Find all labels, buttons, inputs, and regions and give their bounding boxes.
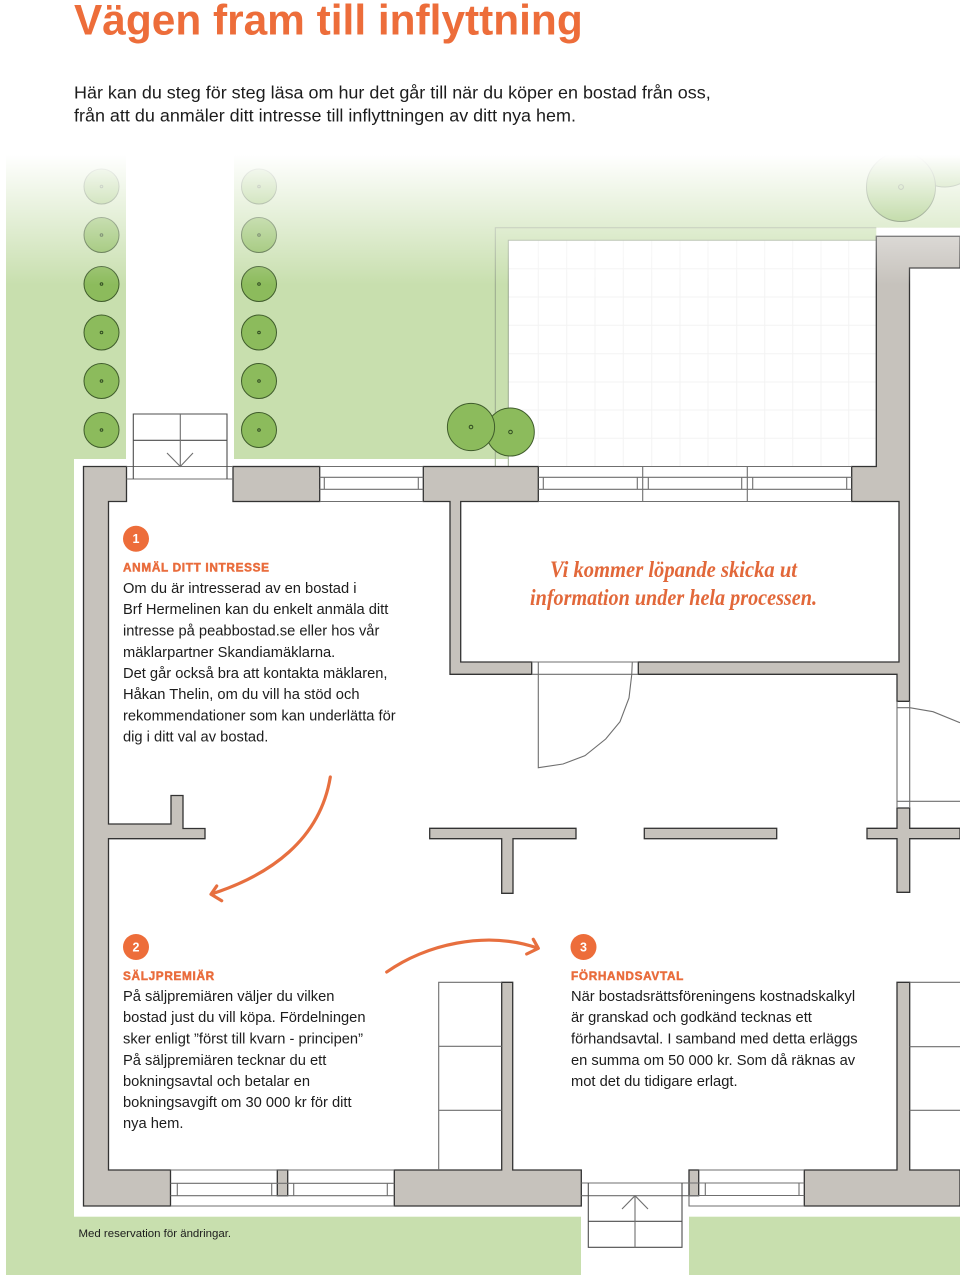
interior walls — [430, 808, 960, 893]
step 2 body — [123, 989, 366, 1132]
intro text: från att du anmäler ditt intresse till inflyttningen av ditt nya hem. — [74, 106, 576, 126]
top facade walls — [233, 236, 960, 701]
step 3 body: mot det du tidigare erlagt. — [571, 1074, 738, 1090]
step 1 body — [123, 581, 396, 746]
step 1 body: Håkan Thelin, om du vill ha stöd och — [123, 687, 360, 703]
step 3 number badge — [570, 934, 596, 960]
step 3 body: När bostadsrättsföreningens kostnadskalkyl — [571, 989, 855, 1005]
trees: left row — [84, 169, 119, 448]
step 3 body: är granskad och godkänd tecknas ett — [571, 1010, 812, 1026]
trees: top right — [866, 117, 960, 222]
step 2 body: bokningsavgift om 30 000 kr för ditt — [123, 1095, 352, 1111]
step 3 body — [571, 989, 858, 1090]
step 2 body: sker enligt ”först till kvarn - principen” — [123, 1032, 363, 1048]
trees: terrace pair — [447, 403, 534, 456]
step 2 body: På säljpremiären väljer du vilken — [123, 989, 334, 1005]
step 2 body: nya hem. — [123, 1116, 183, 1132]
step 1 body: mäklarpartner Skandiamäklarna. — [123, 645, 335, 661]
door: right wall — [897, 701, 960, 808]
step 1 body: Om du är intresserad av en bostad i — [123, 581, 356, 597]
handwritten callout — [530, 557, 817, 610]
intro text — [74, 82, 711, 126]
handwritten callout: information under hela processen. — [530, 585, 817, 610]
bottom walls — [277, 982, 960, 1206]
step 1 body: Det går också bra att kontakta mäklaren, — [123, 666, 388, 682]
step 1 body: intresse på peabbostad.se eller hos vår — [123, 624, 379, 640]
arrow: step 1 to step 2 — [211, 777, 330, 901]
footnote: Med reservation för ändringar. — [78, 1228, 231, 1240]
entrance stairs top — [126, 414, 233, 479]
step 3 heading: FÖRHANDSAVTAL — [571, 969, 684, 983]
left wall — [84, 466, 205, 1206]
step 3 body: förhandsavtal. I samband med detta erläggs — [571, 1032, 858, 1048]
step 2 number badge — [123, 934, 149, 960]
windows: top facade — [320, 466, 852, 502]
step 3 number badge: 3 — [580, 940, 587, 954]
step 1 body: rekommendationer som kan underlätta för — [123, 708, 396, 724]
trees: right row — [242, 169, 276, 448]
handwritten callout: Vi kommer löpande skicka ut — [550, 557, 798, 582]
terrace — [495, 228, 876, 466]
intro text: Här kan du steg för steg läsa om hur det går till när du köper en bostad från oss, — [74, 82, 711, 102]
step 1 body: dig i ditt val av bostad. — [123, 730, 268, 746]
door: inner room — [532, 662, 638, 768]
step 1 — [123, 526, 396, 746]
entrance stairs bottom — [581, 1183, 689, 1247]
windows: bottom facade — [170, 1170, 804, 1206]
step 3 — [570, 934, 858, 1090]
step 2 body: bokningsavtal och betalar en — [123, 1074, 310, 1090]
step 1 heading: ANMÄL DITT INTRESSE — [123, 560, 270, 574]
step 3 body: en summa om 50 000 kr. Som då räknas av — [571, 1053, 856, 1069]
arrow: step 2 to step 3 — [387, 939, 538, 972]
step 2 number badge: 2 — [133, 940, 140, 954]
closets — [439, 982, 960, 1170]
step 1 number badge — [123, 526, 149, 552]
step 2 body: bostad just du vill köpa. Fördelningen — [123, 1010, 366, 1026]
step 2 — [123, 934, 366, 1132]
step 1 body: Brf Hermelinen kan du enkelt anmäla ditt — [123, 602, 388, 618]
white fade over the top of the garden — [0, 0, 960, 285]
step 2 heading: SÄLJPREMIÄR — [123, 969, 215, 983]
step 1 number badge: 1 — [133, 532, 140, 546]
step 2 body: På säljpremiären tecknar du ett — [123, 1053, 326, 1069]
